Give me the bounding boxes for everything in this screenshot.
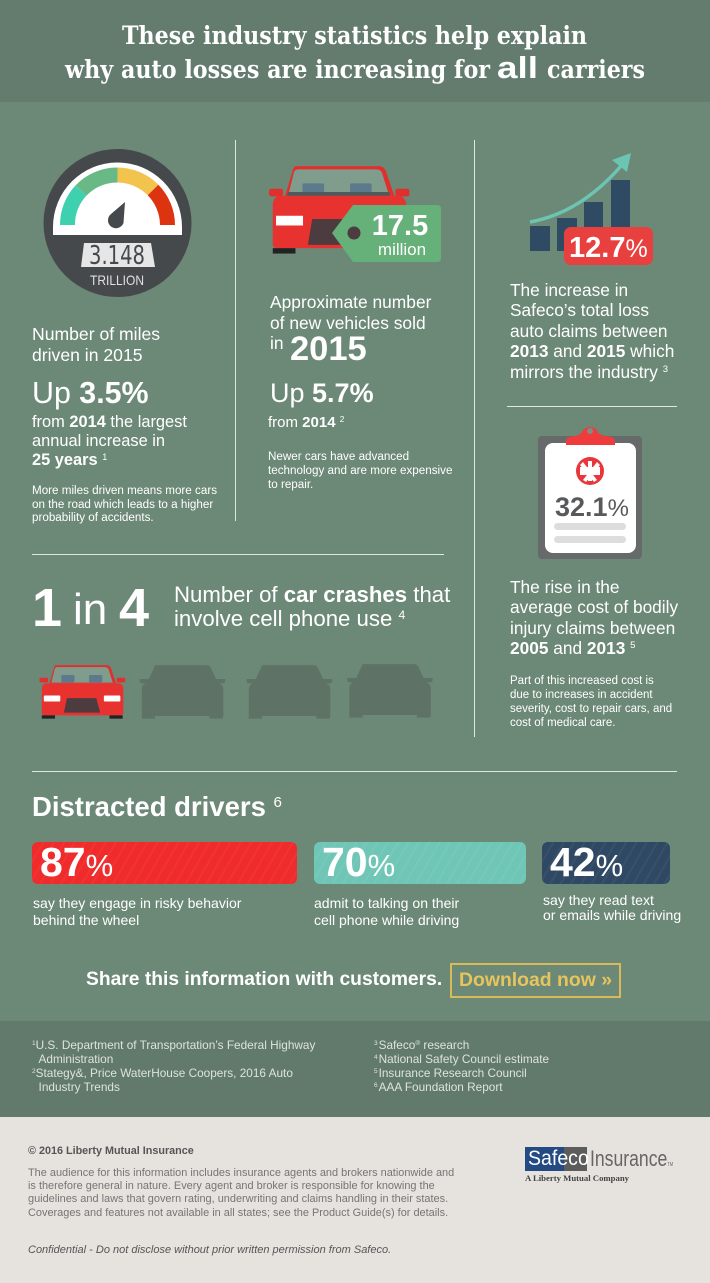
title: These industry statistics help explain: [122, 21, 587, 50]
text: total loss description: [510, 280, 674, 382]
text: read text: say they read text: [543, 892, 654, 908]
footnotes left column: 2Stategy&, Price WaterHouse Coopers, 2016 Auto: [32, 1066, 293, 1080]
icon: clipboard with 32.1%: [538, 427, 642, 559]
disclaimer: guidelines and laws that govern rating, underwriting and claims handling in their states.: [28, 1193, 448, 1205]
disclaimer: is therefore general in nature. Every agent and broker is responsible for knowing the: [28, 1180, 435, 1192]
title: all: [497, 50, 538, 85]
icon: bar chart with arrow and 12.7% badge: 12.7%: [569, 232, 648, 264]
text: total loss description: The increase in: [510, 280, 628, 300]
text: risky behavior: say they engage in risky behavior: [33, 895, 241, 911]
text: total loss description: 2013 and 2015 which: [510, 341, 674, 361]
text: in 2015: in: [270, 333, 284, 353]
disclaimer: The audience for this information includes insurance agents and brokers nationwide and: [28, 1167, 454, 1179]
stat: up 5.7%: Up 5.7%: [270, 378, 374, 408]
text: approximate number: Approximate number: [270, 292, 431, 312]
text: number of miles: driven in 2015: [32, 344, 143, 364]
text: annual increase: annual increase in: [32, 432, 165, 450]
panel: miles driven: [32, 149, 217, 524]
confidential notice: Confidential - Do not disclose without prior written permission from Safeco.: [28, 1244, 391, 1256]
stat: 1 in 4: 1: [32, 578, 62, 638]
button: download now: Download now »: [459, 969, 612, 991]
text: increased cost note: cost of medical care.: [510, 717, 615, 729]
text: bodily injury description: injury claims between: [510, 618, 675, 638]
text: more miles note: probability of accidents.: [32, 511, 154, 524]
text: bodily injury description: average cost of bodily: [510, 597, 678, 617]
panel: distracted driver stats: [32, 838, 681, 928]
panel: new vehicles sold: [268, 166, 452, 491]
footnotes left column: Administration: [39, 1052, 113, 1066]
bar: 42%: [542, 842, 670, 884]
text: talking on phone: cell phone while driving: [314, 912, 459, 928]
footnotes band: [0, 1021, 710, 1117]
stat: 1 in 4: [32, 578, 149, 638]
text: bodily injury description: [510, 576, 678, 658]
bar: 87%: [32, 842, 297, 884]
text: more miles note: on the road which leads to a higher: [32, 498, 213, 511]
text: more miles note: More miles driven means more cars: [32, 484, 217, 497]
text: read text: [543, 892, 681, 923]
logo: Safeco Insurance: Safeco: [528, 1147, 589, 1170]
text: car crashes: [174, 582, 450, 631]
text: bodily injury description: The rise in the: [510, 576, 620, 596]
bar: 70%: [314, 842, 526, 884]
icon: red car with price tag: million: [378, 240, 426, 259]
title: [64, 21, 645, 85]
bar: 70%: 70%: [322, 838, 395, 884]
text: total loss description: Safeco’s total loss: [510, 300, 649, 320]
panel: total loss claims: [510, 153, 674, 382]
text: approximate number: of new vehicles sold: [270, 312, 426, 332]
footer: [0, 1117, 710, 1283]
text: newer cars note: technology and are more expensive: [268, 464, 452, 477]
bar: 87%: 87%: [40, 838, 113, 884]
copyright: © 2016 Liberty Mutual Insurance: [28, 1145, 194, 1157]
text: talking on phone: admit to talking on their: [314, 895, 459, 911]
text: read text: or emails while driving: [543, 907, 681, 923]
text: increased cost note: Part of this increased cost is: [510, 675, 654, 687]
title: carriers: [547, 55, 645, 84]
text: newer cars note: to repair.: [268, 478, 313, 491]
text: car crashes: involve cell phone use 4: [174, 606, 405, 631]
icon: clipboard with 32.1%: 32.1%: [555, 492, 629, 522]
text: increased cost note: due to increases in accident: [510, 689, 653, 701]
text: risky behavior: [33, 895, 242, 928]
text: annual increase: from 2014 the largest: [32, 413, 187, 431]
stat: 1 in 4: 4: [119, 578, 149, 638]
footnotes right column: [374, 1038, 549, 1094]
header band: [0, 0, 710, 102]
text: newer cars note: [268, 450, 452, 491]
logo: Safeco Insurance: InsuranceTM: [590, 1146, 673, 1171]
title: why auto losses are increasing for: [64, 55, 491, 84]
heading: distracted drivers: Distracted drivers 6: [32, 791, 282, 822]
text: share information: Share this information with customers.: [86, 969, 442, 990]
footnotes left column: Industry Trends: [39, 1080, 120, 1094]
bar: 42%: 42%: [550, 838, 623, 884]
text: total loss description: auto claims between: [510, 320, 668, 340]
text: in 2015: 2015: [290, 330, 367, 368]
text: annual increase: [32, 413, 187, 469]
icon: speedometer gauge: TRILLION: [90, 272, 144, 288]
call to action: [86, 963, 621, 998]
button: download now: [450, 963, 621, 998]
disclaimer: [28, 1167, 454, 1219]
text: from 2014: from 2014 2: [268, 414, 344, 431]
panel: 1 in 4 crashes: [32, 578, 450, 719]
footnotes right column: 3 Safeco® research: [374, 1038, 469, 1052]
disclaimer: Coverages and features not available in all states; see the Product Guide(s) for details.: [28, 1207, 448, 1219]
text: total loss description: mirrors the industry 3: [510, 362, 668, 382]
footnotes left column: [32, 1038, 316, 1094]
text: approximate number: [270, 292, 432, 332]
icon: bar chart with arrow and 12.7% badge: [530, 153, 653, 265]
text: increased cost note: [510, 675, 672, 729]
footnotes right column: 6 AAA Foundation Report: [374, 1080, 503, 1094]
text: newer cars note: Newer cars have advanced: [268, 450, 409, 463]
icon: speedometer gauge: [44, 149, 192, 297]
footnotes left column: 1U.S. Department of Transportation’s Federal Highway: [32, 1038, 315, 1052]
text: number of miles: Number of miles: [32, 324, 160, 344]
icon: red car with price tag: 17.5: [372, 210, 428, 242]
text: car crashes: Number of car crashes that: [174, 582, 450, 607]
icon: speedometer gauge: 3.148: [89, 241, 145, 271]
icon: four cars, one red: [40, 664, 433, 719]
footnotes right column: 5 Insurance Research Council: [374, 1066, 527, 1080]
stat: 1 in 4: in: [73, 585, 107, 634]
text: risky behavior: behind the wheel: [33, 912, 139, 928]
logo: Safeco Insurance: [525, 1146, 673, 1183]
logo: Safeco Insurance: A Liberty Mutual Company: [525, 1173, 629, 1183]
icon: red car with price tag: [269, 166, 441, 262]
text: more miles note: [32, 484, 217, 524]
panel: bodily injury claims: [510, 427, 678, 729]
footnotes right column: 4 National Safety Council estimate: [374, 1052, 549, 1066]
text: number of miles: [32, 324, 160, 364]
text: increased cost note: severity, cost to repair cars, and: [510, 703, 672, 715]
text: talking on phone: [314, 895, 459, 928]
stat: up 3.5%: Up 3.5%: [32, 376, 149, 410]
text: bodily injury description: 2005 and 2013 5: [510, 638, 635, 658]
text: annual increase: 25 years 1: [32, 451, 107, 469]
